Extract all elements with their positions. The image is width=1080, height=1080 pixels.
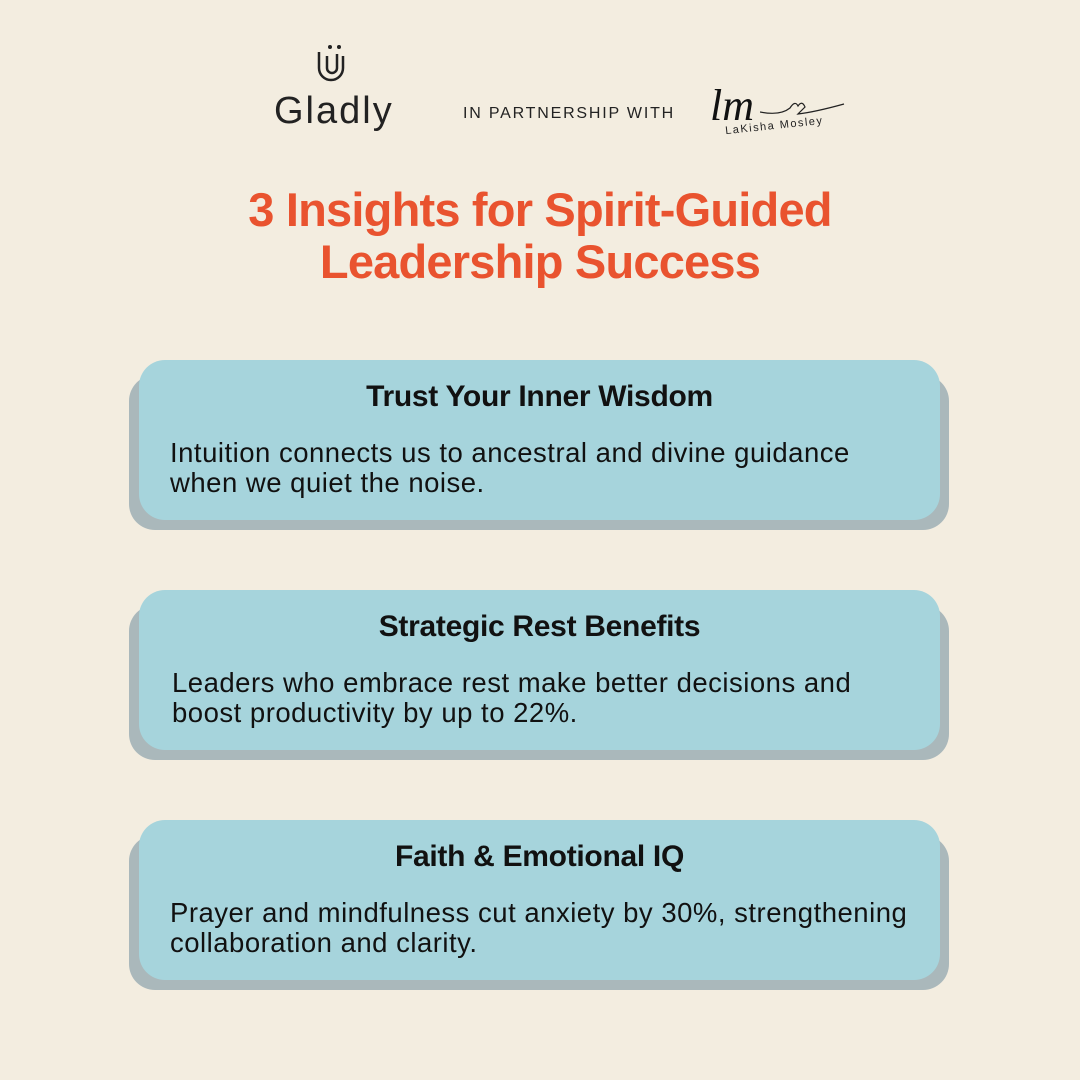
logo: LaKisha Mosley: lm bbox=[710, 81, 754, 130]
panel: faith & emotional IQ bbox=[129, 820, 949, 990]
text block: Leaders who embrace rest make better decisions and bbox=[172, 667, 851, 698]
text block: when we quiet the noise. bbox=[170, 467, 485, 498]
title: 3 Insights for Spirit-Guided bbox=[248, 183, 832, 236]
panel: trust your inner wisdom bbox=[129, 360, 949, 530]
heading: Trust Your Inner Wisdom bbox=[366, 380, 713, 413]
logo: Gladly: Gladly bbox=[274, 90, 394, 132]
text block: Intuition connects us to ancestral and divine guidance bbox=[170, 437, 850, 468]
text block bbox=[170, 897, 907, 958]
title bbox=[248, 183, 832, 288]
text block bbox=[170, 437, 850, 498]
title: Leadership Success bbox=[320, 235, 760, 288]
partnership text: IN PARTNERSHIP WITH bbox=[463, 105, 675, 122]
logo: LaKisha Mosley: LaKisha Mosley bbox=[725, 115, 824, 137]
icon: Gladly mark bbox=[318, 45, 344, 82]
text block: Prayer and mindfulness cut anxiety by 30%, strengthening bbox=[170, 897, 907, 928]
logo: Gladly bbox=[274, 45, 394, 132]
heading: Strategic Rest Benefits bbox=[379, 610, 700, 643]
heading: Faith & Emotional IQ bbox=[395, 840, 684, 873]
text block bbox=[172, 667, 851, 728]
text block: boost productivity by up to 22%. bbox=[172, 697, 578, 728]
panel: strategic rest bbox=[129, 590, 949, 760]
logo: LaKisha Mosley bbox=[710, 81, 844, 137]
text block: collaboration and clarity. bbox=[170, 927, 478, 958]
